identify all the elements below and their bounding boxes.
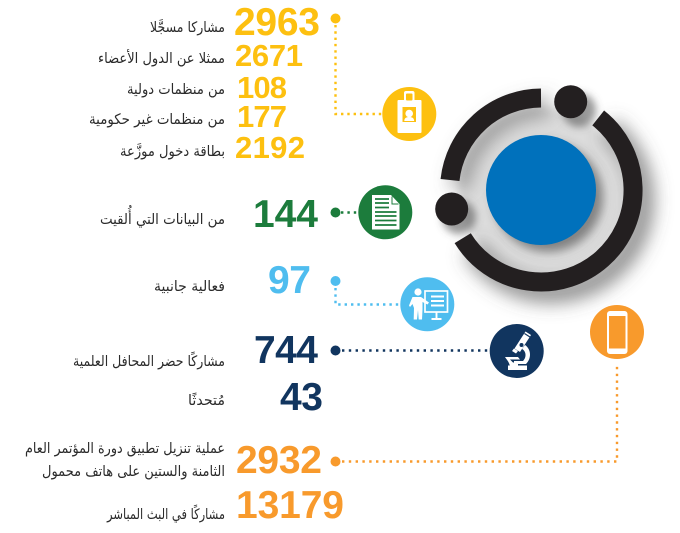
stat: 108 international organizations: من منظمات دولية (127, 82, 225, 98)
stat: 744 science forum participants: 744 (254, 329, 318, 372)
stat: 2192 entry badges: بطاقة دخول موزَّعة (120, 142, 225, 160)
icon: document (358, 185, 412, 239)
stat: 2932 app downloads: عملية تنزيل تطبيق دورة المؤتمر العام (25, 441, 225, 457)
stat: 144 statements delivered: من البيانات التي أُلقيت (100, 206, 225, 228)
stat: 2963 registered participants: مشاركا مسجَّلا (150, 18, 225, 36)
icon: ID badge (382, 87, 436, 141)
stat: 2932 app downloads (25, 439, 322, 482)
navy connector (330, 346, 490, 356)
stat: 2192 entry badges (120, 130, 305, 165)
stat: 43 speakers: مُتحدثًا (188, 392, 225, 409)
stat: 2963 registered participants (150, 1, 320, 44)
stat: 97 side events: فعالية جانبية (154, 279, 225, 295)
stat: 2671 member state representatives: ممثلا عن الدول الأعضاء (98, 49, 225, 67)
stat: 744 science forum participants (73, 329, 318, 372)
stat: 2192 entry badges: 2192 (235, 130, 305, 165)
stat: 2671 member state representatives (98, 38, 303, 73)
stat: 97 side events: 97 (268, 259, 311, 302)
orange connector (330, 363, 617, 466)
stat: 144 statements delivered: 144 (253, 193, 318, 236)
stat: 177 non-governmental organizations: 177 (237, 99, 287, 134)
stat: 2932 app downloads: 2932 (236, 439, 322, 482)
icon: mobile phone (590, 305, 644, 359)
stat: 744 science forum participants: مشاركًا حضر المحافل العلمية (73, 352, 225, 370)
icon: microscope (490, 324, 544, 378)
stat: 177 non-governmental organizations: من منظمات غير حكومية (89, 112, 225, 128)
stat: 108 international organizations (127, 70, 287, 105)
stat: 108 international organizations: 108 (237, 70, 287, 105)
stat: 177 non-governmental organizations (89, 99, 287, 134)
stat: 43 speakers (188, 376, 323, 419)
stat: 13179 livestream participants: 13179 (236, 484, 344, 527)
stat: 2932 app downloads: الثامنة والستين على هاتف محمول (42, 464, 225, 480)
stat: 2963 registered participants: 2963 (234, 1, 320, 44)
stat: 2671 member state representatives: 2671 (235, 38, 303, 73)
yellow connector (330, 14, 382, 114)
green connector (330, 208, 358, 218)
icon: presenter at board (400, 277, 454, 331)
stat: 144 statements delivered (100, 193, 318, 236)
stat: 97 side events (154, 259, 311, 302)
central ring graphic (435, 85, 643, 292)
stat: 13179 livestream participants: مشاركًا في البث المباشر (106, 505, 225, 523)
stat: 13179 livestream participants (106, 484, 344, 527)
light blue connector (330, 276, 400, 304)
stat: 43 speakers: 43 (280, 376, 323, 419)
